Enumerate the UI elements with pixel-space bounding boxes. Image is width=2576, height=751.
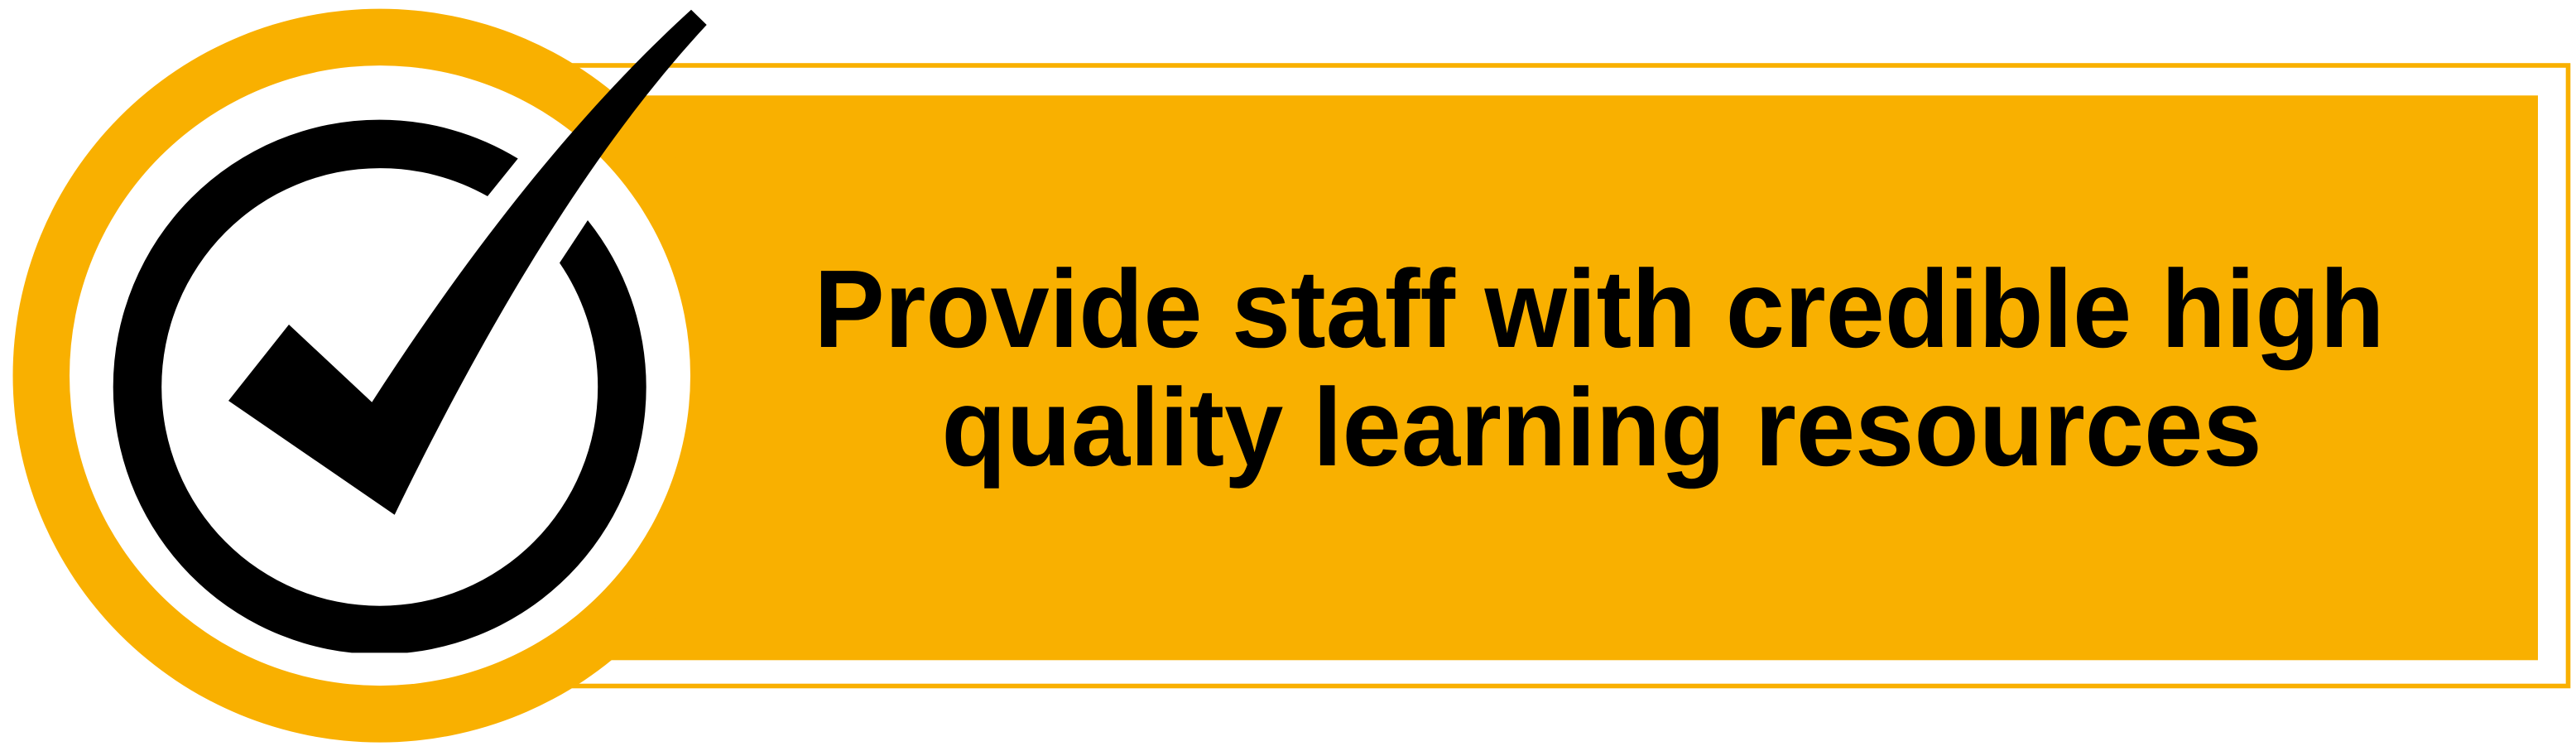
icon: black check mark xyxy=(228,10,707,515)
heading text xyxy=(814,247,2385,489)
icon: black check circle with gap xyxy=(113,120,646,652)
heading text: quality learning resources xyxy=(941,366,2262,489)
heading text: Provide staff with credible high xyxy=(814,247,2385,371)
icon: orange ring badge xyxy=(13,9,747,743)
panel: outer outline frame xyxy=(499,65,2568,686)
panel: orange banner background xyxy=(497,95,2538,660)
